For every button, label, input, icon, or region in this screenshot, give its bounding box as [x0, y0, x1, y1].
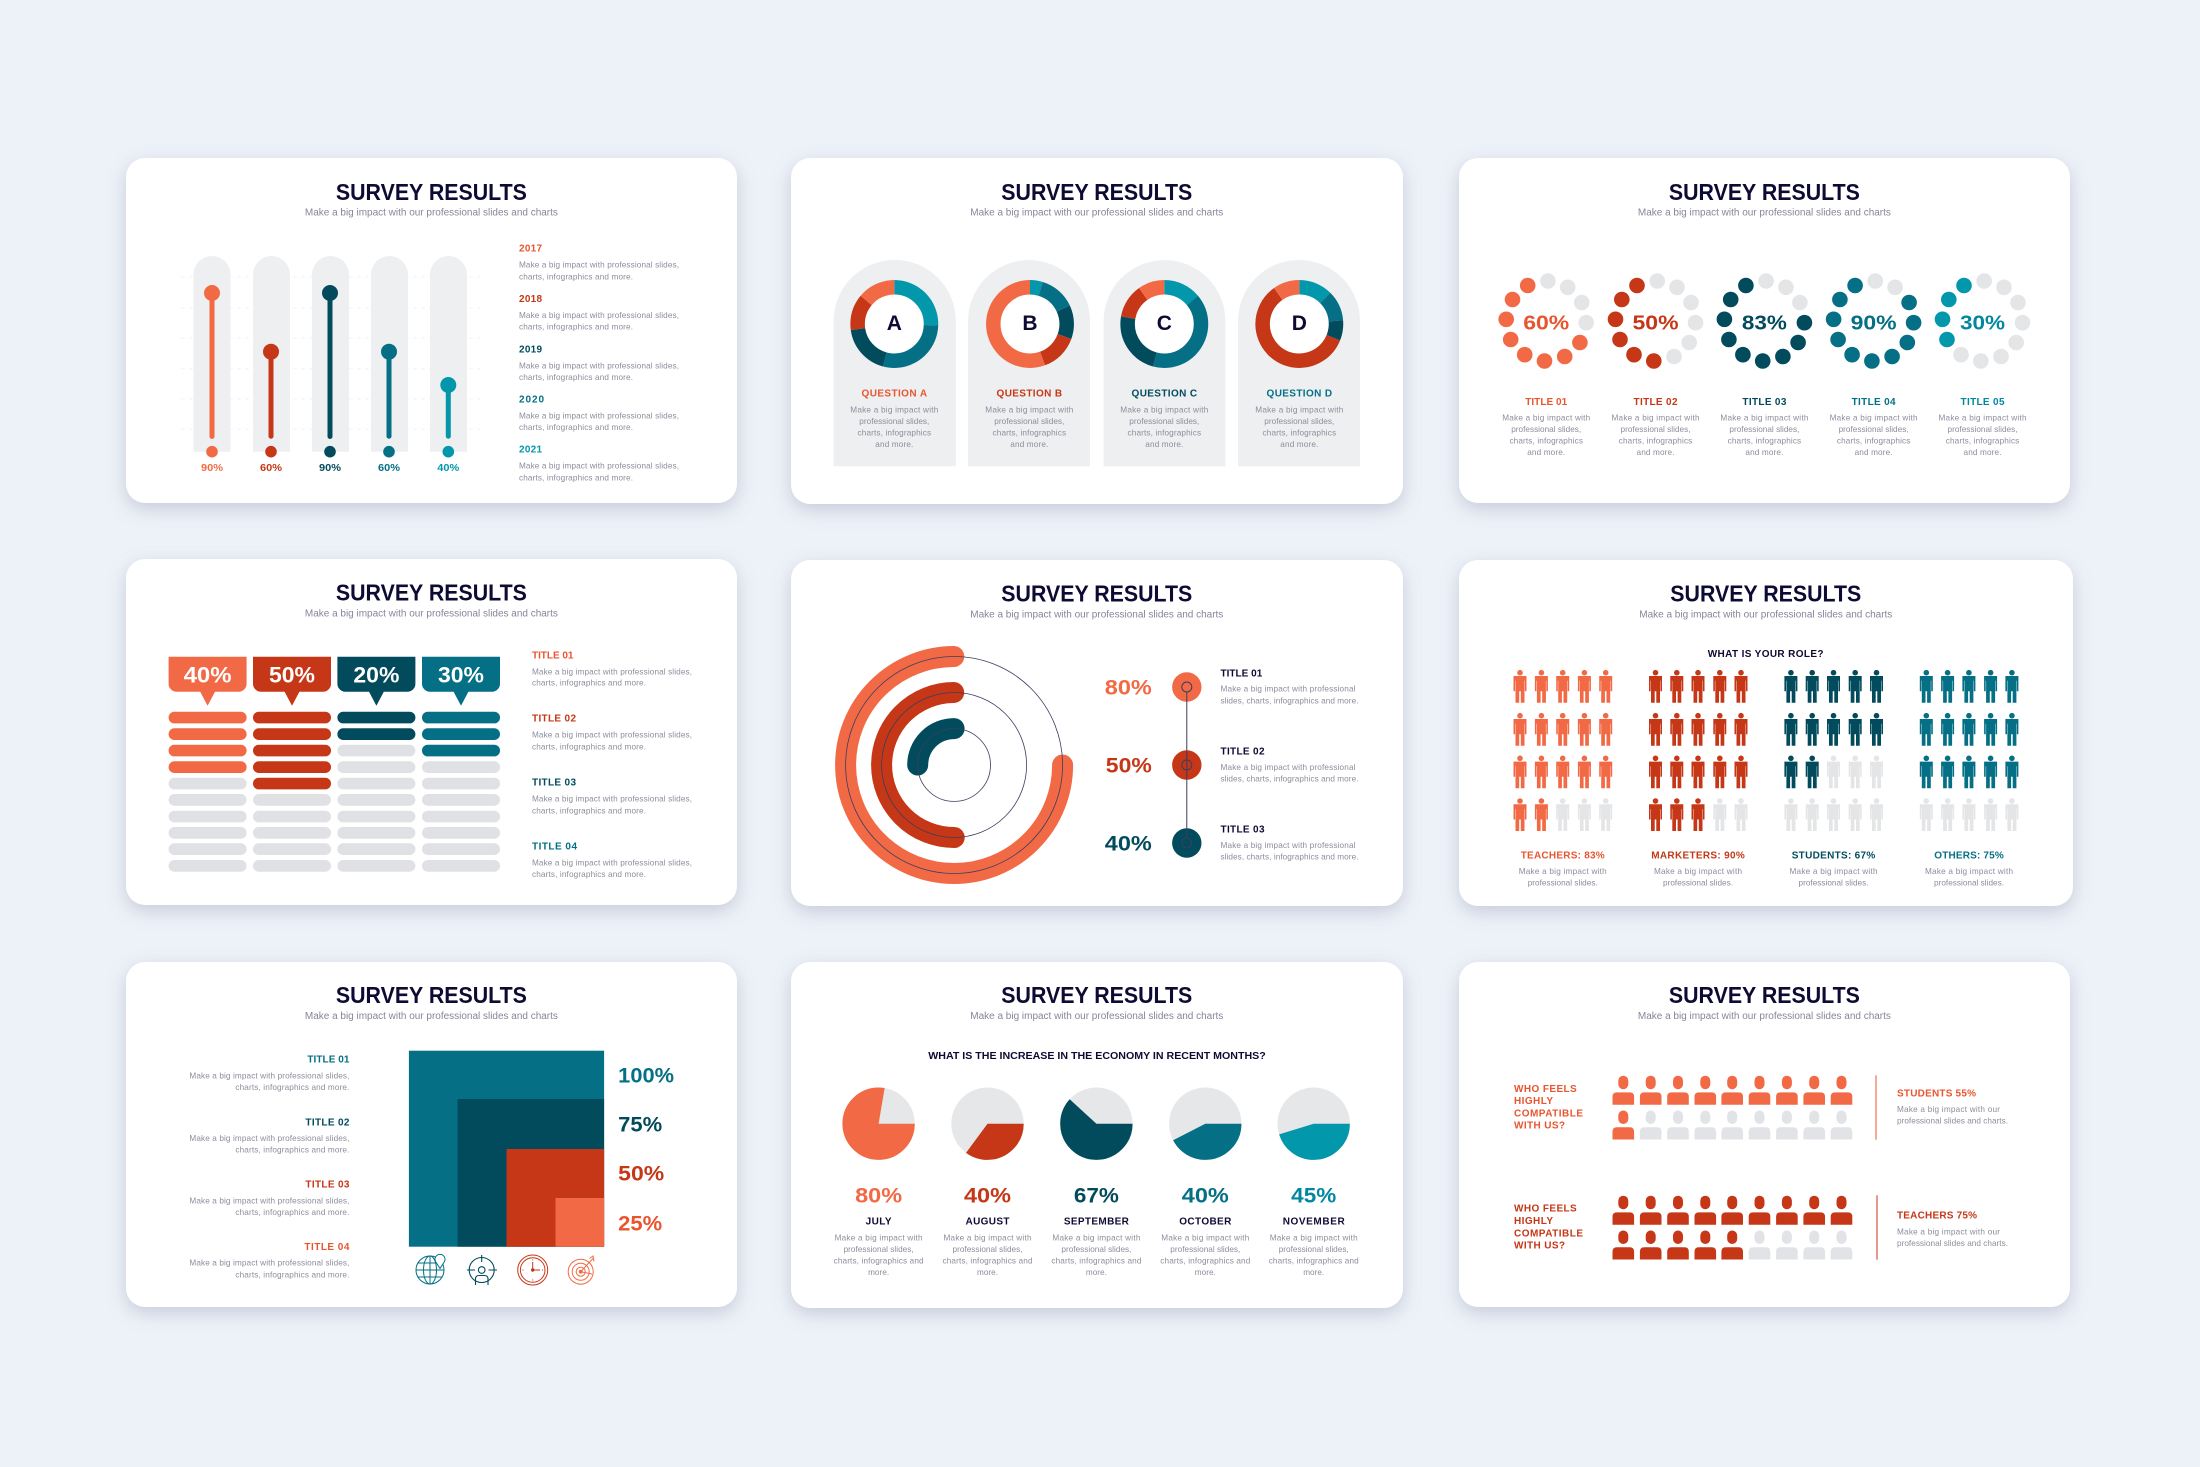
- callout 20 percent with bars: [337, 657, 415, 872]
- people group students: STUDENTS: 67%: [1792, 850, 1875, 861]
- text block title 03: [189, 1180, 350, 1217]
- pie august: 40%: [964, 1184, 1011, 1207]
- text block 2020: 2020: [519, 394, 544, 405]
- people group teachers: Make a big impact with: [1519, 867, 1607, 876]
- divider teachers: [1876, 1195, 1878, 1260]
- text block 2020: charts, infographics and more.: [519, 423, 633, 432]
- arch card question B: B: [1022, 312, 1038, 335]
- question label teachers: COMPATIBLE: [1514, 1228, 1583, 1239]
- divider students: [1876, 1075, 1877, 1140]
- text block 2020: Make a big impact with professional slides,: [519, 411, 679, 420]
- text block students: [1897, 1088, 2008, 1126]
- panel: nested squares chart: [126, 962, 737, 1307]
- percent labels: 75%: [618, 1113, 663, 1136]
- dot ring 90 percent: Make a big impact with: [1830, 413, 1918, 422]
- pie august: Make a big impact with: [944, 1233, 1032, 1242]
- text block title 03: [532, 777, 692, 815]
- arch card question A: [834, 260, 956, 466]
- dot ring 90 percent: TITLE 04: [1852, 397, 1896, 408]
- title: SURVEY RESULTS: [1001, 179, 1192, 205]
- card background: [1459, 560, 2073, 906]
- pie november: charts, infographics and: [1269, 1256, 1359, 1265]
- text block title 01: [189, 1055, 350, 1092]
- panel: compatibility pictograms: [1459, 962, 2070, 1307]
- dot ring 60 percent: 60%: [1523, 312, 1569, 334]
- dot ring 60 percent: charts, infographics: [1509, 436, 1583, 445]
- dot ring 83 percent: TITLE 03: [1742, 397, 1787, 408]
- text block title 02: Make a big impact with professional slides,: [189, 1134, 349, 1143]
- arch card question D: D: [1292, 312, 1307, 335]
- text block title 01: [532, 650, 692, 688]
- text block title 04: [532, 841, 692, 879]
- subtitle: Make a big impact with our professional slides and charts: [305, 1011, 558, 1022]
- arch card question B: Make a big impact with: [985, 405, 1074, 414]
- title: SURVEY RESULTS: [1001, 581, 1192, 607]
- callout 30 percent with bars: [422, 657, 500, 872]
- text block title 01: Make a big impact with professional slides,: [189, 1071, 349, 1080]
- arch card question D: professional slides,: [1264, 417, 1334, 426]
- subtitle: Make a big impact with our professional slides and charts: [970, 207, 1223, 218]
- title: SURVEY RESULTS: [336, 179, 527, 205]
- radial arc chart: [846, 656, 1063, 874]
- icon: clock: [518, 1255, 548, 1285]
- item 80 percent title 01: 80%: [1105, 676, 1152, 699]
- card background: [791, 158, 1403, 504]
- lollipop column 2021: 40%: [437, 463, 459, 474]
- pie july: more.: [868, 1268, 889, 1277]
- text block students: professional slides and charts.: [1897, 1117, 2008, 1126]
- people group marketers: MARKETERS: 90%: [1651, 850, 1745, 861]
- dot ring 50 percent: charts, infographics: [1619, 436, 1692, 445]
- dot ring 30 percent: [1935, 273, 2030, 457]
- arch card question B: professional slides,: [994, 417, 1064, 426]
- dot ring 60 percent: professional slides,: [1511, 425, 1581, 434]
- text block title 02: [189, 1117, 350, 1155]
- card background: [126, 158, 737, 503]
- pie july: 80%: [855, 1184, 902, 1207]
- question label students: HIGHLY: [1514, 1096, 1553, 1107]
- item 50 percent title 02: 50%: [1106, 754, 1152, 777]
- card background: [791, 560, 1403, 906]
- panel: people pictograms by role: [1459, 560, 2073, 906]
- text block 2019: [519, 344, 679, 382]
- text block title 03: charts, infographics and more.: [532, 806, 646, 815]
- pie september: more.: [1086, 1268, 1107, 1277]
- text block 2017: charts, infographics and more.: [519, 272, 633, 281]
- arch card question B: and more.: [1010, 440, 1048, 449]
- pie september: 67%: [1074, 1184, 1119, 1207]
- pie september: SEPTEMBER: [1064, 1217, 1130, 1228]
- pie october: [1160, 1088, 1251, 1277]
- dot ring 50 percent: professional slides,: [1620, 425, 1690, 434]
- title: SURVEY RESULTS: [1670, 581, 1861, 607]
- arch card question A: charts, infographics: [858, 428, 931, 437]
- percent labels: 50%: [618, 1163, 665, 1186]
- title: SURVEY RESULTS: [1669, 179, 1860, 205]
- arch card question C: Make a big impact with: [1120, 405, 1209, 414]
- dot ring 83 percent: charts, infographics: [1728, 436, 1801, 445]
- pie october: OCTOBER: [1179, 1217, 1232, 1228]
- people group students: professional slides.: [1798, 879, 1868, 888]
- dot ring 30 percent: professional slides,: [1948, 425, 2018, 434]
- item 80 percent title 01: slides, charts, infographics and more.: [1220, 696, 1358, 705]
- pie november: Make a big impact with: [1270, 1233, 1358, 1242]
- dot ring 60 percent: [1498, 273, 1594, 457]
- people group others: professional slides.: [1934, 879, 2004, 888]
- panel: dotted percentage rings: [1459, 158, 2070, 503]
- callout 40 percent with bars: [169, 657, 247, 872]
- question label students: WHO FEELS: [1514, 1084, 1577, 1095]
- people group marketers: Make a big impact with: [1654, 867, 1742, 876]
- text block 2021: charts, infographics and more.: [519, 473, 633, 482]
- text block 2021: [519, 445, 679, 482]
- dot ring 83 percent: 83%: [1742, 312, 1787, 334]
- text block 2018: 2018: [519, 294, 542, 305]
- lollipop column 2021: [430, 256, 467, 474]
- arch card question D: Make a big impact with: [1255, 405, 1344, 414]
- text block title 03: charts, infographics and more.: [235, 1208, 349, 1217]
- pie august: AUGUST: [966, 1217, 1010, 1228]
- people group students: Make a big impact with: [1790, 867, 1878, 876]
- text block title 03: TITLE 03: [532, 777, 576, 788]
- lollipop column 2018: [253, 256, 290, 474]
- text block title 04: Make a big impact with professional slides,: [189, 1259, 349, 1268]
- pie september: Make a big impact with: [1052, 1233, 1141, 1242]
- text block title 02: Make a big impact with professional slides,: [532, 731, 692, 740]
- icon: target with arrow: [568, 1256, 594, 1284]
- text block 2020: [519, 394, 679, 432]
- item 80 percent title 01: TITLE 01: [1220, 668, 1263, 679]
- panel: question donut charts: [791, 158, 1403, 504]
- text block title 02: charts, infographics and more.: [532, 742, 646, 751]
- question heading: WHAT IS YOUR ROLE?: [1708, 649, 1823, 660]
- panel: monthly pie charts: [791, 962, 1403, 1308]
- text block title 01: charts, infographics and more.: [235, 1083, 349, 1092]
- icon: globe with pin: [416, 1254, 445, 1284]
- item 50 percent title 02: TITLE 02: [1220, 746, 1265, 757]
- text block 2019: Make a big impact with professional slides,: [519, 361, 679, 370]
- card background: [1459, 962, 2070, 1307]
- pie august: more.: [977, 1268, 998, 1277]
- pie november: 45%: [1291, 1184, 1337, 1207]
- subtitle: Make a big impact with our professional slides and charts: [1638, 207, 1891, 218]
- arch card question A: Make a big impact with: [850, 405, 939, 414]
- lollipop column 2020: [371, 256, 408, 474]
- question label teachers: WITH US?: [1514, 1240, 1565, 1251]
- dot ring 50 percent: TITLE 02: [1634, 397, 1678, 408]
- callout 50 percent with bars: [253, 657, 331, 872]
- subtitle: Make a big impact with our professional slides and charts: [1639, 610, 1892, 621]
- item 40 percent title 03: Make a big impact with professional: [1220, 841, 1356, 850]
- item 40 percent title 03: 40%: [1105, 832, 1152, 855]
- item 40 percent title 03: TITLE 03: [1220, 824, 1265, 835]
- pie october: professional slides,: [1170, 1245, 1240, 1254]
- dot ring 60 percent: TITLE 01: [1525, 397, 1568, 408]
- item 80 percent title 01: [1105, 668, 1358, 705]
- text block title 01: TITLE 01: [307, 1055, 350, 1066]
- arch card question D: [1238, 260, 1360, 466]
- arch card question A: A: [887, 312, 902, 335]
- people group marketers: [1649, 670, 1748, 888]
- arch card question B: QUESTION B: [997, 389, 1062, 400]
- people grid teachers: [1612, 1196, 1852, 1260]
- item 40 percent title 03: [1105, 824, 1358, 861]
- subtitle: Make a big impact with our professional slides and charts: [305, 207, 558, 218]
- people group teachers: [1514, 670, 1612, 888]
- subtitle: Make a big impact with our professional slides and charts: [305, 609, 558, 620]
- panel: concentric radial arcs: [791, 560, 1403, 906]
- card background: [126, 962, 737, 1307]
- pie november: [1269, 1088, 1359, 1277]
- percent labels: 25%: [618, 1212, 663, 1235]
- text block title 02: [532, 714, 692, 751]
- pie july: charts, infographics and: [834, 1256, 924, 1265]
- question heading: WHAT IS THE INCREASE IN THE ECONOMY IN RECENT MONTHS?: [928, 1051, 1266, 1062]
- pie november: NOVEMBER: [1283, 1217, 1345, 1228]
- item 50 percent title 02: Make a big impact with professional: [1220, 763, 1356, 772]
- arch card question C: professional slides,: [1129, 417, 1199, 426]
- people group others: [1920, 670, 2018, 888]
- lollipop column 2019: 90%: [319, 463, 341, 474]
- pie july: [834, 1088, 924, 1277]
- arch card question D: charts, infographics: [1263, 428, 1336, 437]
- dot ring 30 percent: 30%: [1960, 312, 2005, 334]
- question label teachers: WHO FEELS: [1514, 1204, 1577, 1215]
- title: SURVEY RESULTS: [1001, 982, 1192, 1008]
- callout 30 percent with bars: 30%: [438, 662, 484, 687]
- text block 2017: 2017: [519, 244, 542, 255]
- text block title 03: TITLE 03: [305, 1180, 350, 1191]
- dot ring 50 percent: and more.: [1636, 448, 1674, 457]
- dot ring 50 percent: 50%: [1633, 312, 1679, 334]
- item 50 percent title 02: [1106, 746, 1358, 783]
- dot ring 83 percent: professional slides,: [1729, 425, 1799, 434]
- callout 40 percent with bars: 40%: [184, 662, 232, 687]
- callout 50 percent with bars: 50%: [269, 662, 315, 687]
- question label students: WITH US?: [1514, 1121, 1565, 1132]
- text block title 04: Make a big impact with professional slides,: [532, 858, 692, 867]
- pie july: professional slides,: [844, 1245, 914, 1254]
- text block 2018: charts, infographics and more.: [519, 323, 633, 332]
- text block title 03: Make a big impact with professional slides,: [532, 795, 692, 804]
- arch card question B: charts, infographics: [993, 428, 1066, 437]
- text block 2021: Make a big impact with professional slides,: [519, 462, 679, 471]
- nested squares: [409, 1051, 604, 1247]
- panel: stacked pill bars with callouts: [126, 559, 737, 905]
- pie november: more.: [1303, 1268, 1324, 1277]
- card background: [1459, 158, 2070, 503]
- arch card question A: and more.: [875, 440, 913, 449]
- people group marketers: professional slides.: [1663, 879, 1733, 888]
- text block title 04: [189, 1242, 350, 1279]
- text block title 01: charts, infographics and more.: [532, 679, 646, 688]
- dot ring 30 percent: and more.: [1964, 448, 2002, 457]
- text block students: STUDENTS 55%: [1897, 1088, 1976, 1099]
- percent labels: [618, 1064, 674, 1235]
- subtitle: Make a big impact with our professional slides and charts: [970, 610, 1223, 621]
- text block students: Make a big impact with our: [1897, 1105, 2000, 1114]
- dot ring 50 percent: [1608, 273, 1703, 457]
- pie november: professional slides,: [1279, 1245, 1349, 1254]
- pie august: [942, 1088, 1033, 1277]
- text block title 02: TITLE 02: [532, 714, 576, 725]
- text block 2017: [519, 244, 679, 281]
- item 40 percent title 03: slides, charts, infographics and more.: [1220, 852, 1358, 861]
- text block title 04: TITLE 04: [304, 1242, 350, 1253]
- pie september: charts, infographics and: [1051, 1256, 1142, 1265]
- pie october: more.: [1195, 1268, 1216, 1277]
- arch card question C: and more.: [1145, 440, 1183, 449]
- text block title 02: TITLE 02: [305, 1117, 350, 1128]
- dot ring 30 percent: Make a big impact with: [1938, 413, 2027, 422]
- text block 2021: 2021: [519, 445, 542, 456]
- lollipop column 2017: [194, 256, 230, 474]
- text block 2018: Make a big impact with professional slides,: [519, 311, 679, 320]
- item 80 percent title 01: Make a big impact with professional: [1220, 685, 1356, 694]
- text block title 04: TITLE 04: [532, 841, 577, 852]
- text block title 04: charts, infographics and more.: [532, 870, 646, 879]
- people group students: [1784, 670, 1883, 888]
- card background: [126, 559, 737, 905]
- text block teachers: TEACHERS 75%: [1897, 1211, 1977, 1222]
- title: SURVEY RESULTS: [1669, 982, 1860, 1008]
- pie july: Make a big impact with: [835, 1233, 923, 1242]
- arch card question D: QUESTION D: [1267, 389, 1332, 400]
- pie august: charts, infographics and: [942, 1256, 1033, 1265]
- text block teachers: [1897, 1211, 2008, 1248]
- subtitle: Make a big impact with our professional slides and charts: [970, 1011, 1223, 1022]
- pie october: 40%: [1182, 1184, 1229, 1207]
- lollipop column 2017: 90%: [201, 463, 223, 474]
- pie august: professional slides,: [952, 1245, 1022, 1254]
- dot ring 60 percent: Make a big impact with: [1502, 413, 1591, 422]
- arch card question A: QUESTION A: [862, 389, 927, 400]
- text block 2017: Make a big impact with professional slides,: [519, 261, 679, 270]
- lollipop column 2020: 60%: [378, 463, 400, 474]
- dot ring 90 percent: professional slides,: [1839, 425, 1909, 434]
- text block title 02: charts, infographics and more.: [235, 1146, 349, 1155]
- title: SURVEY RESULTS: [336, 580, 527, 606]
- dot ring 50 percent: Make a big impact with: [1612, 413, 1700, 422]
- arch card question C: [1104, 260, 1225, 466]
- timeline connector with ring markers: [1182, 682, 1192, 848]
- arch card question B: [968, 260, 1090, 466]
- lollipop column 2018: 60%: [260, 463, 282, 474]
- question label teachers: HIGHLY: [1514, 1216, 1553, 1227]
- item 50 percent title 02: slides, charts, infographics and more.: [1220, 774, 1358, 783]
- people group teachers: TEACHERS: 83%: [1521, 850, 1605, 861]
- arch card question D: and more.: [1280, 440, 1318, 449]
- dot ring 30 percent: TITLE 05: [1960, 397, 2005, 408]
- dot ring 90 percent: charts, infographics: [1837, 436, 1910, 445]
- text block title 01: Make a big impact with professional slides,: [532, 667, 692, 676]
- pie october: charts, infographics and: [1160, 1256, 1251, 1265]
- people group others: OTHERS: 75%: [1934, 850, 2004, 861]
- dot ring 90 percent: [1826, 273, 1921, 457]
- arch card question A: professional slides,: [859, 417, 929, 426]
- callout 20 percent with bars: 20%: [353, 662, 399, 687]
- arch card question C: C: [1157, 312, 1172, 335]
- text block title 01: TITLE 01: [532, 650, 574, 661]
- question label teachers: [1514, 1204, 1583, 1251]
- text block 2019: charts, infographics and more.: [519, 373, 633, 382]
- people group others: Make a big impact with: [1925, 867, 2013, 876]
- arch card question C: QUESTION C: [1132, 389, 1197, 400]
- text block 2019: 2019: [519, 344, 542, 355]
- people group teachers: professional slides.: [1528, 879, 1598, 888]
- text block 2018: [519, 294, 679, 332]
- text block teachers: professional slides and charts.: [1897, 1239, 2008, 1248]
- dot ring 60 percent: and more.: [1527, 448, 1565, 457]
- title: SURVEY RESULTS: [336, 982, 527, 1008]
- pie october: Make a big impact with: [1161, 1233, 1250, 1242]
- text block teachers: Make a big impact with our: [1897, 1227, 2000, 1236]
- text block title 04: charts, infographics and more.: [235, 1270, 349, 1279]
- dot ring 83 percent: and more.: [1745, 448, 1783, 457]
- pie july: JULY: [866, 1217, 892, 1228]
- dot ring 90 percent: 90%: [1851, 312, 1897, 334]
- dot ring 90 percent: and more.: [1855, 448, 1893, 457]
- dot ring 30 percent: charts, infographics: [1946, 436, 2019, 445]
- dot ring 83 percent: [1717, 273, 1812, 457]
- question label students: [1514, 1084, 1583, 1132]
- subtitle: Make a big impact with our professional slides and charts: [1638, 1011, 1891, 1022]
- panel: vertical lollipop chart by year: [126, 158, 737, 503]
- people grid students: [1612, 1076, 1852, 1140]
- lollipop column 2019: [312, 256, 349, 474]
- icon: person in crosshair: [467, 1255, 497, 1285]
- arch card question C: charts, infographics: [1128, 428, 1201, 437]
- question label students: COMPATIBLE: [1514, 1109, 1583, 1120]
- card background: [791, 962, 1403, 1308]
- pie september: professional slides,: [1061, 1245, 1131, 1254]
- text block title 03: Make a big impact with professional slides,: [189, 1196, 349, 1205]
- percent labels: 100%: [618, 1064, 674, 1087]
- dot ring 83 percent: Make a big impact with: [1720, 413, 1809, 422]
- pie september: [1051, 1088, 1142, 1277]
